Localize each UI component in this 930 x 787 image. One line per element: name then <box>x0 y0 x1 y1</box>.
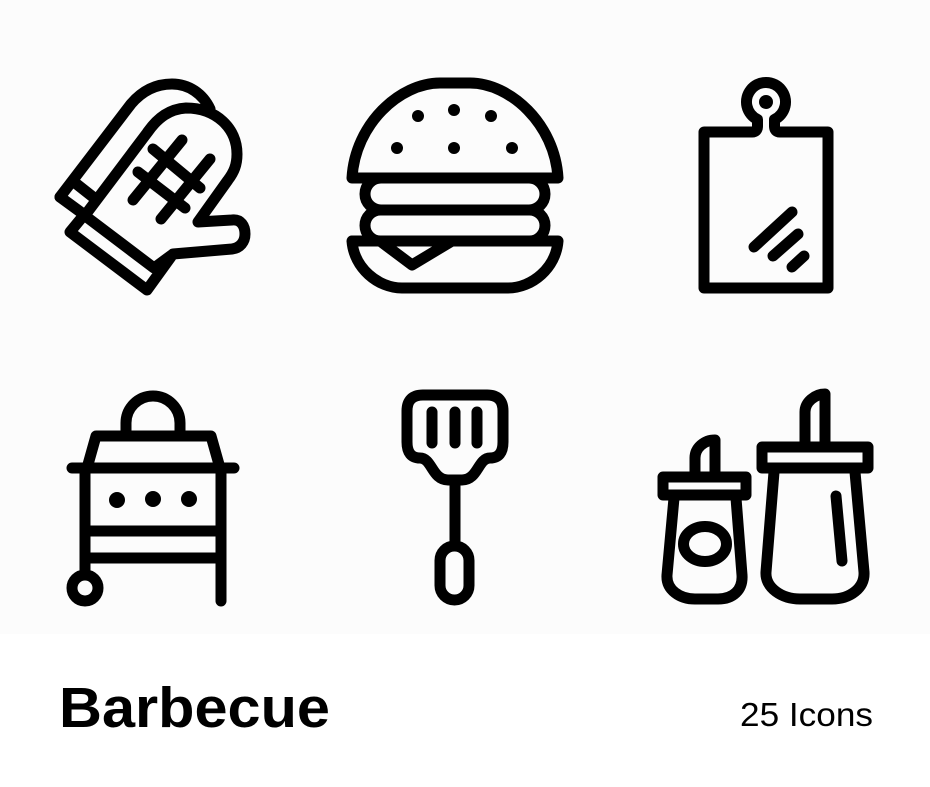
large bottle <box>762 394 868 599</box>
icon: barbecue grill <box>72 396 234 601</box>
title: Barbecue <box>59 676 330 740</box>
icon: sauce bottles <box>663 394 868 599</box>
icon: oven mitt <box>60 84 245 290</box>
icon: cutting board <box>704 82 828 288</box>
icon count: 25 Icons <box>740 696 873 733</box>
icon: burger <box>352 83 558 288</box>
icon: spatula <box>407 395 503 600</box>
small bottle <box>663 440 746 599</box>
